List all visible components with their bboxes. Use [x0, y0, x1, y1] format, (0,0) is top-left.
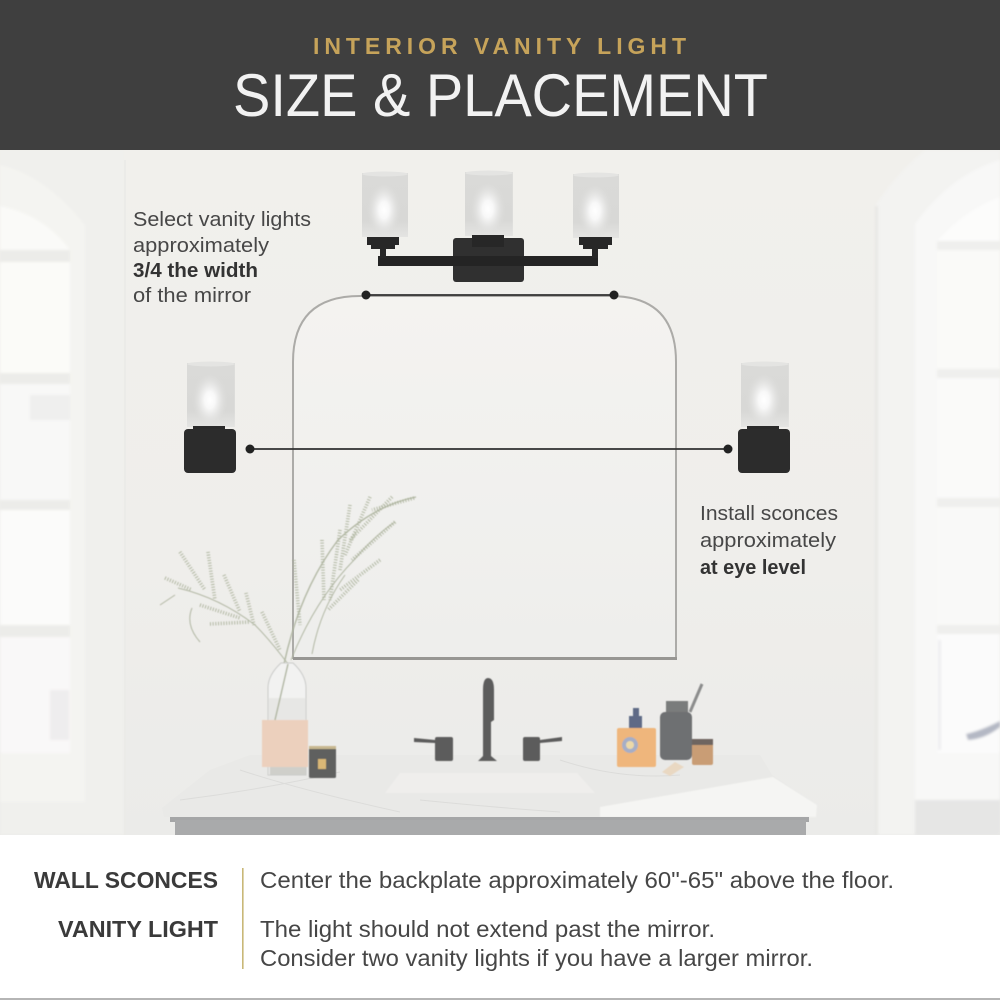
right door and window — [875, 150, 1000, 835]
photo background: bathroom wall — [0, 150, 1000, 835]
footer notes panel — [0, 835, 1000, 1000]
measure line: eye level — [246, 444, 732, 454]
left wall sconce — [184, 362, 236, 473]
gold divider — [242, 868, 244, 969]
callout: vanity width: Select vanity lights — [133, 209, 311, 231]
callout: sconce height: at eye level — [700, 557, 806, 579]
callout: sconce height — [700, 503, 838, 579]
callout: vanity width: approximately — [133, 235, 269, 257]
vanity light note: Consider two vanity lights if you have a larger mirror. — [260, 945, 813, 971]
vanity light note: The light should not extend past the mirror. — [260, 916, 715, 942]
candle — [309, 746, 336, 778]
title: SIZE & PLACEMENT — [233, 62, 768, 129]
plant in vase — [160, 497, 416, 664]
mirror — [293, 296, 677, 660]
vanity light fixture — [362, 170, 619, 282]
cups and arms — [367, 235, 612, 266]
backplate — [453, 238, 524, 282]
wall sconces note: Center the backplate approximately 60"-65" above the floor. — [260, 867, 894, 893]
vanity countertop and cabinet — [162, 755, 817, 835]
shades — [362, 170, 619, 239]
wall sconces label: WALL SCONCES — [34, 867, 218, 893]
eyebrow heading: INTERIOR VANITY LIGHT — [313, 33, 686, 59]
glass vase — [262, 663, 308, 775]
callout: vanity width: 3/4 the width — [133, 260, 258, 282]
vanity light label: VANITY LIGHT — [58, 916, 219, 942]
callout: sconce height: Install sconces — [700, 503, 838, 525]
soap, cup and jar — [617, 684, 713, 776]
vanity light note — [260, 916, 813, 971]
left window — [0, 150, 124, 835]
callout: vanity width — [133, 209, 311, 307]
faucet and handles — [414, 678, 562, 761]
header band — [0, 0, 1000, 150]
callout: sconce height: approximately — [700, 530, 836, 552]
callout: vanity width: of the mirror — [133, 285, 251, 307]
measure line: vanity width — [362, 290, 618, 300]
right wall sconce — [738, 362, 790, 473]
